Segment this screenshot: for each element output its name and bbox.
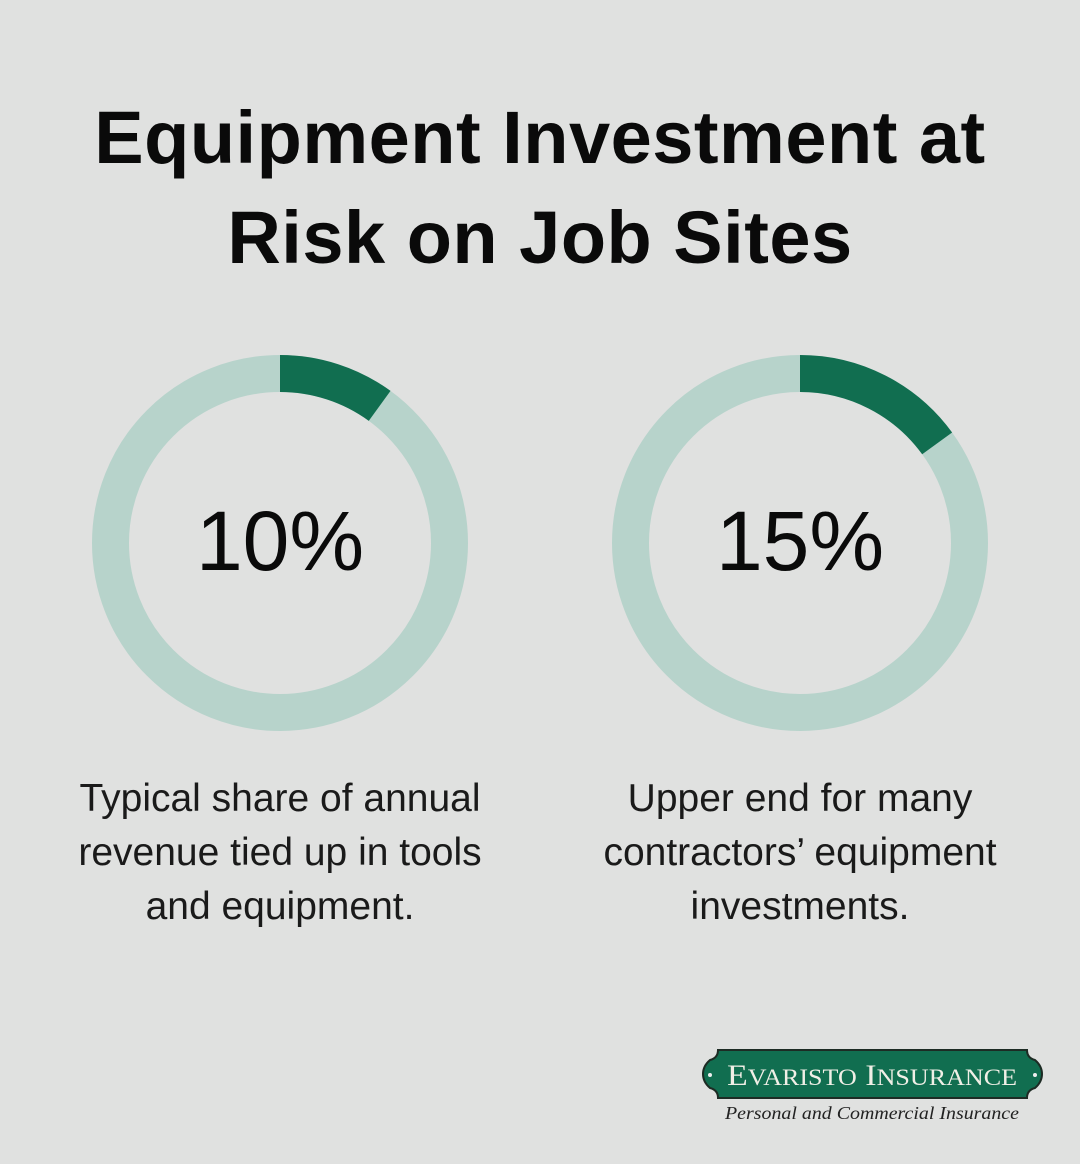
caption left: Typical share of annual revenue tied up in tools and equipment. <box>78 777 482 928</box>
title <box>94 96 986 279</box>
donut chart: 10% <box>92 355 468 731</box>
donut chart: 15% <box>612 355 988 731</box>
logo <box>702 1049 1043 1123</box>
donut chart: 10%: 10% <box>196 494 364 588</box>
caption right: Upper end for many contractors’ equipment investments. <box>603 777 997 928</box>
logo: Personal and Commercial Insurance <box>724 1103 1019 1123</box>
donut chart: 15%: 15% <box>716 494 884 588</box>
logo: EVARISTO INSURANCE <box>727 1059 1017 1092</box>
title: Equipment Investment at <box>94 96 986 179</box>
title: Risk on Job Sites <box>227 196 853 279</box>
